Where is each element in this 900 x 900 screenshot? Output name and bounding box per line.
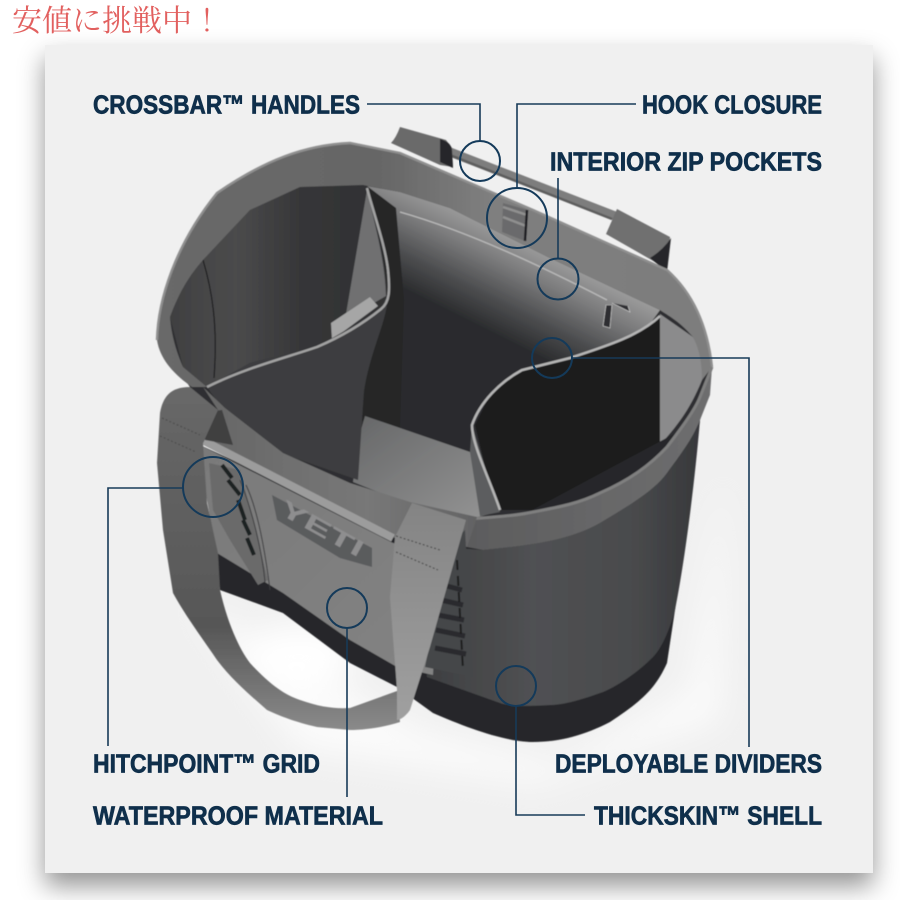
callout: Hook closure: HOOK CLOSURE (642, 90, 822, 120)
front rim band (203, 387, 477, 547)
strap stitching (160, 418, 440, 570)
bag interior base (157, 143, 712, 548)
YETI logo: YETI (276, 495, 369, 562)
right divider flap (470, 425, 500, 516)
front panel (196, 443, 440, 675)
callout: Hitchpoint grid: HITCHPOINT™ GRID (93, 748, 320, 778)
right compartment light wall (650, 314, 702, 455)
soft floor glow (190, 470, 725, 785)
right hitchpoint grid (425, 530, 473, 677)
right strap (390, 503, 466, 720)
callout: Hitchpoint grid (93, 457, 320, 778)
callout: Thickskin shell (496, 666, 822, 830)
callout: Hook closure (487, 90, 822, 248)
body silhouette underlay (200, 420, 700, 742)
right compartment dark (475, 316, 660, 510)
callout: Interior zip pockets (538, 146, 822, 300)
left divider face (207, 293, 388, 480)
right rim band (467, 367, 712, 550)
back handle (391, 127, 671, 272)
rim outer highlight (157, 143, 712, 367)
YETI logo (272, 495, 372, 567)
tote bag photo (157, 127, 712, 742)
hook closure (502, 203, 528, 241)
callout: Waterproof material: WATERPROOF MATERIAL (93, 800, 383, 830)
callout: Crossbar handles (93, 90, 500, 181)
left compartment seam (203, 260, 215, 378)
floor (353, 416, 496, 520)
zip seam (400, 212, 607, 300)
callout: Deployable dividers: DEPLOYABLE DIVIDERS (555, 748, 822, 778)
left compartment (170, 185, 388, 387)
right divider edge stripe (472, 316, 660, 510)
zip pull (603, 303, 630, 328)
zip tab on left divider (331, 297, 378, 340)
light strap strip (204, 441, 393, 538)
callout: Deployable dividers (532, 338, 822, 778)
back wall (360, 186, 660, 452)
back webbing (157, 143, 712, 387)
callout: Waterproof material (93, 588, 383, 830)
callout: Crossbar handles: CROSSBAR™ HANDLES (93, 90, 360, 120)
callout: Interior zip pockets: INTERIOR ZIP POCKETS (550, 146, 822, 176)
back wall left shadow (360, 186, 404, 428)
callout: Thickskin shell: THICKSKIN™ SHELL (594, 800, 822, 830)
left hitchpoint grid (209, 463, 270, 590)
divider flap wedge (345, 190, 386, 320)
band top edge (467, 367, 712, 519)
right body (420, 420, 700, 706)
left strap (157, 387, 400, 730)
left strap dark gap (205, 410, 233, 445)
left divider edge stripe (207, 188, 389, 387)
headline: 安値に挑戦中！ (12, 5, 222, 38)
